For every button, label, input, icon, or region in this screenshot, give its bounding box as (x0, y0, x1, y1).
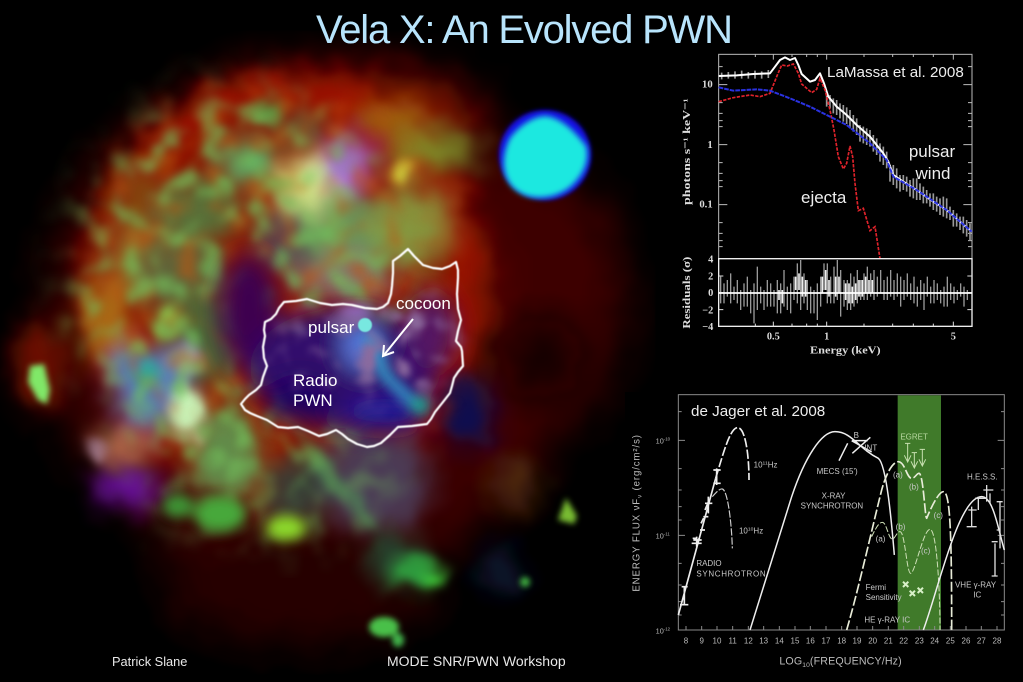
label: Radio PWN: Radio (293, 371, 337, 390)
SED x tick labels: 23 (915, 636, 924, 645)
HE gamma-ray IC dashed lower (872, 522, 940, 630)
residual frame (719, 259, 972, 326)
Fermi sensitivity crosses (903, 582, 923, 596)
SED labels: Fermi (866, 583, 886, 592)
SED x tick labels: 10 (713, 636, 722, 645)
SED y tick labels: 10 (656, 531, 664, 540)
pulsar dot (358, 318, 372, 332)
radio synchrotron curve (678, 478, 716, 615)
SED x tick labels: 18 (837, 636, 847, 645)
spectrum y axis title: photons s⁻¹ keV⁻¹ (682, 98, 693, 205)
SED labels: RADIO (696, 559, 722, 568)
SED x tick labels: 8 (684, 636, 689, 645)
SED x tick labels: 13 (759, 636, 769, 645)
panel: broadband SED chart (625, 392, 1023, 682)
SED labels: HE γ-RAY IC (864, 616, 910, 625)
SED labels: (b) (909, 482, 919, 491)
SED labels: (a) (893, 470, 903, 479)
SED x tick labels: 12 (744, 636, 753, 645)
SED x tick labels: 21 (884, 636, 893, 645)
SED labels: 10 (739, 526, 748, 535)
SED labels: Hz (753, 526, 763, 535)
nebula image: Vela X composite (15, 60, 625, 647)
SED labels (696, 431, 998, 625)
energy x tick labels: 1 (824, 332, 829, 343)
SED x tick labels: 16 (806, 636, 815, 645)
title: Vela X: An Evolved PWN (316, 8, 733, 52)
residual noise (721, 260, 967, 323)
SED x tick labels: 22 (899, 636, 909, 645)
SED x tick labels: 25 (946, 636, 955, 645)
label: pulsar wind: pulsar (909, 142, 955, 161)
residual zero line (719, 290, 972, 295)
SED x tick labels: 11 (729, 636, 737, 645)
arrow to cocoon (383, 319, 413, 356)
SED labels: 11 (763, 460, 768, 466)
SED x tick labels: 28 (993, 636, 1002, 645)
residual y tick labels: −4 (702, 322, 713, 333)
10^11 Hz break curve (716, 428, 749, 480)
spectrum y tick labels: 10 (702, 80, 713, 91)
SED labels: Hz (768, 460, 778, 469)
X-ray synchrotron curve (750, 432, 894, 630)
SED labels: B (854, 431, 859, 440)
label: cocoon: cocoon (396, 294, 451, 313)
SED x tick labels: 26 (962, 636, 971, 645)
SED labels: H.E.S.S. (967, 472, 998, 481)
10^10 Hz break curve (712, 489, 732, 548)
SED x tick labels: 9 (699, 636, 704, 645)
SED labels: (c) (921, 546, 931, 555)
SED x tick labels: 24 (930, 636, 940, 645)
SED x tick labels (684, 636, 1002, 645)
SED labels: Sensitivity (866, 593, 902, 602)
SED x axis title: LOG (779, 656, 802, 668)
SED frame and ticks (678, 395, 1004, 630)
panel: X-ray spectrum chart: 1 (707, 140, 713, 151)
footer: presenter: Patrick Slane (112, 654, 187, 669)
residual dense bright noise (779, 270, 872, 303)
HE gamma-ray IC dashed upper (847, 462, 952, 630)
energy x axis title: Energy (keV) (810, 346, 881, 357)
energy x tick labels: 5 (951, 332, 956, 343)
SED labels: MECS (15') (817, 467, 858, 476)
label: ejecta: ejecta (801, 188, 847, 207)
SED x tick labels: 20 (868, 636, 878, 645)
SED labels: IC (973, 590, 982, 599)
SED y axis title: ENERGY FLUX νF (632, 499, 643, 592)
label: pulsar: pulsar (308, 318, 355, 337)
SED labels: (c) (934, 511, 943, 520)
label: pulsar wind: wind (915, 164, 950, 183)
SED y tick labels: 10 (656, 436, 664, 445)
SED y tick labels: -11 (664, 531, 670, 536)
SED labels: X-RAY (822, 491, 846, 500)
SED x tick labels: 15 (791, 636, 800, 645)
citation: LaMassa: LaMassa et al. 2008 (827, 64, 964, 81)
panel: X-ray spectrum chart (672, 50, 1023, 357)
lower-left green filaments (162, 494, 306, 541)
bright blue source at upper right (499, 110, 591, 200)
energy x tick labels (767, 332, 956, 343)
SED labels: 10 (748, 526, 754, 532)
energy x tick labels: 0.5 (767, 332, 780, 343)
SED x tick labels: 19 (853, 636, 862, 645)
SED labels: SYNCHROTRON (801, 502, 863, 511)
residual y tick labels: 2 (708, 271, 713, 282)
Fermi band highlight (898, 395, 941, 630)
SED y tick labels (656, 436, 671, 635)
radio data points (680, 468, 721, 605)
ejecta model curve (719, 64, 880, 259)
residual y tick labels: −2 (702, 305, 713, 316)
SED y tick labels: 10 (656, 626, 664, 635)
red-orange and green mottling (95, 80, 445, 440)
SED labels: SYNCHROTRON (696, 570, 766, 579)
cavity and PWN interior (219, 254, 456, 431)
residual y tick labels: 4 (708, 255, 713, 266)
label: Radio PWN: PWN (293, 391, 333, 410)
SED x tick labels: 14 (775, 636, 784, 645)
SED x tick labels: 17 (822, 636, 831, 645)
residual y axis title: Residuals (σ) (682, 257, 693, 329)
SED x axis title: 10 (802, 662, 810, 669)
SED labels: (b) (896, 522, 906, 531)
SED y tick labels: -12 (664, 626, 671, 631)
citation: de Jager: de Jager et al. 2008 (691, 403, 825, 420)
SED x tick labels: 27 (977, 636, 986, 645)
HESS data points (967, 485, 1003, 577)
spectrum frame and ticks (719, 54, 972, 259)
spectrum data noise (722, 70, 970, 240)
SED labels: VHE γ-RAY (955, 580, 997, 589)
SED labels: EGRET (900, 432, 928, 441)
bright red rim (105, 90, 465, 480)
VHE IC curve (923, 497, 1004, 630)
SED y axis title: (erg/cm²/s) (632, 435, 643, 494)
SED labels: (a) (876, 534, 886, 543)
SED y axis title: ν (638, 495, 644, 498)
EGRET arrows (904, 443, 926, 468)
SED labels: 10 (754, 460, 763, 469)
radio PWN contour (241, 249, 463, 447)
pulsar wind model curve (719, 87, 972, 232)
panel: X-ray spectrum chart: 0.1 (699, 200, 713, 211)
footer: workshop: MODE SNR/PWN Workshop (387, 653, 566, 669)
SED x axis title: (FREQUENCY/Hz) (810, 656, 902, 668)
SED y tick labels: -10 (664, 436, 671, 441)
MECS and BeppoSAX bow tie (839, 437, 872, 461)
residual y tick labels (702, 255, 713, 333)
residual y tick labels: 0 (708, 288, 713, 299)
SED labels: INT (864, 444, 877, 453)
total spectrum curve (719, 57, 972, 232)
